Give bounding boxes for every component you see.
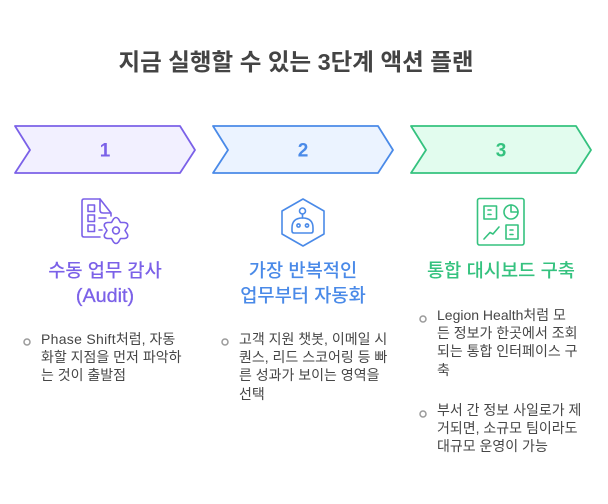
chevron: step 3 — [411, 126, 591, 173]
bullet: step 3 first — [420, 316, 426, 322]
text: step 3 first bullet: 든 정보가 한곳에서 조회 — [437, 325, 577, 341]
chevron: step 3: 3 — [496, 140, 506, 162]
icon: checklist document with gear — [82, 199, 128, 244]
chevron: step 2 — [213, 126, 393, 173]
bullet: step 1 — [24, 339, 30, 345]
text: step 2 bullet — [239, 331, 387, 402]
text: step 3 first bullet: 축 — [437, 362, 450, 378]
heading: step 3: 통합 대시보드 구축 — [427, 256, 575, 283]
chevron: step 1 — [15, 126, 195, 173]
text: step 3 second bullet — [437, 402, 581, 454]
text: step 3 second bullet: 부서 간 정보 사일로가 제 — [437, 402, 581, 418]
heading: step 2 — [240, 256, 366, 308]
icon: robot in hexagon — [282, 199, 324, 246]
heading: step 2: 업무부터 자동화 — [240, 281, 366, 308]
text: step 2 bullet: 퀀스, 리드 스코어링 등 빠 — [239, 349, 387, 365]
text: step 2 bullet: 선택 — [239, 386, 265, 402]
chevron: step 2: 2 — [298, 140, 308, 162]
text: step 2 bullet: 고객 지원 챗봇, 이메일 시 — [239, 331, 387, 347]
text: step 3 first bullet — [437, 307, 577, 378]
chevron: step 1: 1 — [100, 140, 111, 162]
text: step 1 bullet — [41, 331, 182, 383]
heading: step 1: (Audit) — [76, 285, 134, 307]
bullet: step 2 — [222, 339, 228, 345]
title: 지금 실행할 수 있는 3단계 액션 플랜 — [119, 49, 473, 75]
heading: step 2: 가장 반복적인 — [249, 256, 357, 283]
text: step 1 bullet: 화할 지점을 먼저 파악하 — [41, 349, 181, 365]
heading: step 1: 수동 업무 감사 — [48, 256, 162, 283]
heading: step 1 — [48, 256, 162, 307]
text: step 3 first bullet: 되는 통합 인터페이스 구 — [437, 343, 577, 359]
icon: dashboard — [478, 198, 524, 245]
bullet: step 3 second — [420, 411, 426, 417]
text: step 3 second bullet: 거되면, 소규모 팀이라도 — [437, 420, 577, 436]
text: step 2 bullet: 른 성과가 보이는 영역을 — [239, 367, 379, 383]
text: step 3 second bullet: 대규모 운영이 가능 — [437, 438, 548, 454]
text: step 1 bullet: 는 것이 출발점 — [41, 367, 126, 383]
text: step 1 bullet: Phase Shift처럼, 자동 — [41, 331, 175, 347]
text: step 3 first bullet: Legion Health처럼 모 — [437, 307, 566, 323]
